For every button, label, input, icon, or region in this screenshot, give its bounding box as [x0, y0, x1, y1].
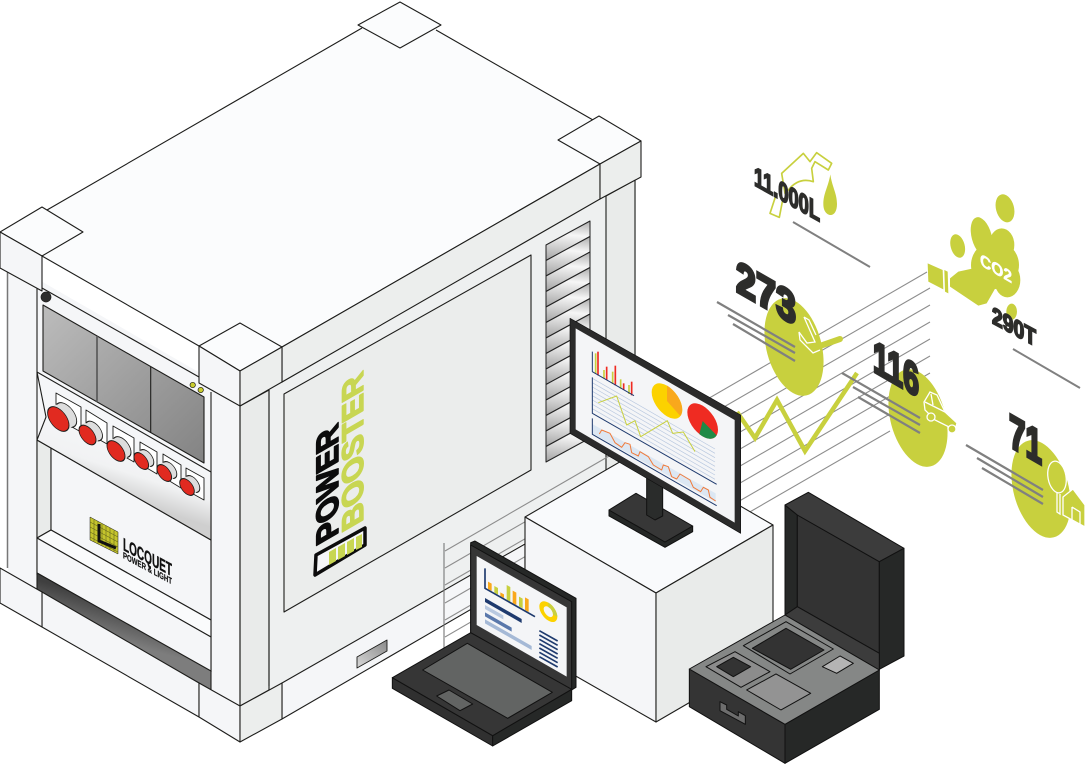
case small recess [706, 652, 770, 687]
pedestal [525, 449, 773, 722]
dark floor gap [37, 573, 211, 690]
top face [42, 28, 600, 371]
laptop base [392, 678, 493, 746]
pie chart red [687, 397, 718, 445]
right band [282, 164, 600, 382]
corner cap back [358, 2, 441, 48]
pie chart yellow [652, 377, 682, 425]
monitor stand [609, 477, 693, 547]
icon: fuel nozzle [770, 153, 837, 217]
locquet tagline: POWER & LIGHT [123, 551, 172, 587]
icon: tree and house [1045, 460, 1085, 527]
monitor bezel [570, 318, 741, 533]
laptop donut [539, 597, 557, 626]
number: tonnes: 290T [992, 302, 1036, 352]
case square pad [747, 674, 811, 710]
stat: flights [717, 251, 840, 402]
stat: fuel saved [754, 153, 870, 267]
right post [606, 180, 635, 480]
ventilation louvres [546, 221, 590, 462]
co2 label: CO2 [980, 249, 1012, 287]
right base band [282, 544, 525, 719]
laptop [392, 541, 576, 746]
number: 273: 273 [736, 251, 796, 336]
area chart [592, 418, 717, 506]
laptop lid [471, 541, 576, 690]
laptop table lines [539, 631, 558, 667]
number: 71: 71 [1009, 403, 1042, 475]
laptop touchpad [437, 690, 473, 711]
right panel [284, 255, 531, 612]
control panel [37, 372, 211, 540]
case lid [785, 492, 904, 670]
case body [689, 669, 785, 763]
laptop bar chart [485, 568, 535, 617]
data link lines [444, 272, 930, 688]
case handle [720, 702, 745, 724]
laptop screen [477, 556, 567, 677]
bottom cap front [199, 683, 282, 742]
circle [1001, 434, 1081, 544]
stat: co2 [928, 192, 1080, 388]
number: 116: 116 [873, 331, 919, 408]
bottom cap left [0, 568, 42, 627]
power booster container unit [0, 2, 641, 742]
laptop keyboard [423, 643, 552, 718]
corner post [240, 390, 269, 706]
case small pad [822, 656, 853, 673]
button plates [56, 393, 204, 500]
red buttons [48, 398, 200, 499]
lower front door [37, 440, 51, 538]
base rail [42, 592, 199, 717]
trend line [737, 373, 857, 451]
locquet name: LOCQUET [123, 535, 172, 581]
stat: vehicles [842, 331, 958, 473]
power wordmark: POWER [311, 418, 345, 550]
laptop list bars [485, 598, 532, 650]
right face [240, 165, 636, 706]
monitor screen [576, 328, 735, 523]
icon: plane [799, 317, 840, 353]
battery icon [315, 528, 365, 575]
case large recess [743, 622, 833, 674]
corner cap left [0, 207, 83, 291]
locquet logo mark [90, 517, 118, 554]
icon: co2 cloud [928, 192, 1020, 320]
status lights [41, 292, 203, 393]
kick plate [37, 530, 211, 637]
line chart [592, 377, 717, 484]
equipment case [689, 492, 904, 763]
stat: homes [966, 403, 1085, 544]
monitor [570, 318, 741, 547]
corner cap front [199, 323, 282, 406]
bar chart [592, 352, 634, 396]
circle [878, 363, 958, 473]
booster wordmark: BOOSTER [336, 366, 369, 537]
corner cap right [558, 116, 641, 199]
icon: van [924, 392, 957, 433]
screens [43, 305, 204, 463]
number: litres: 11.000L [754, 162, 820, 228]
icon: fuel drop [823, 174, 837, 215]
base vent [357, 640, 387, 668]
case top [689, 615, 879, 724]
circle [754, 292, 834, 402]
front face [8, 262, 240, 710]
